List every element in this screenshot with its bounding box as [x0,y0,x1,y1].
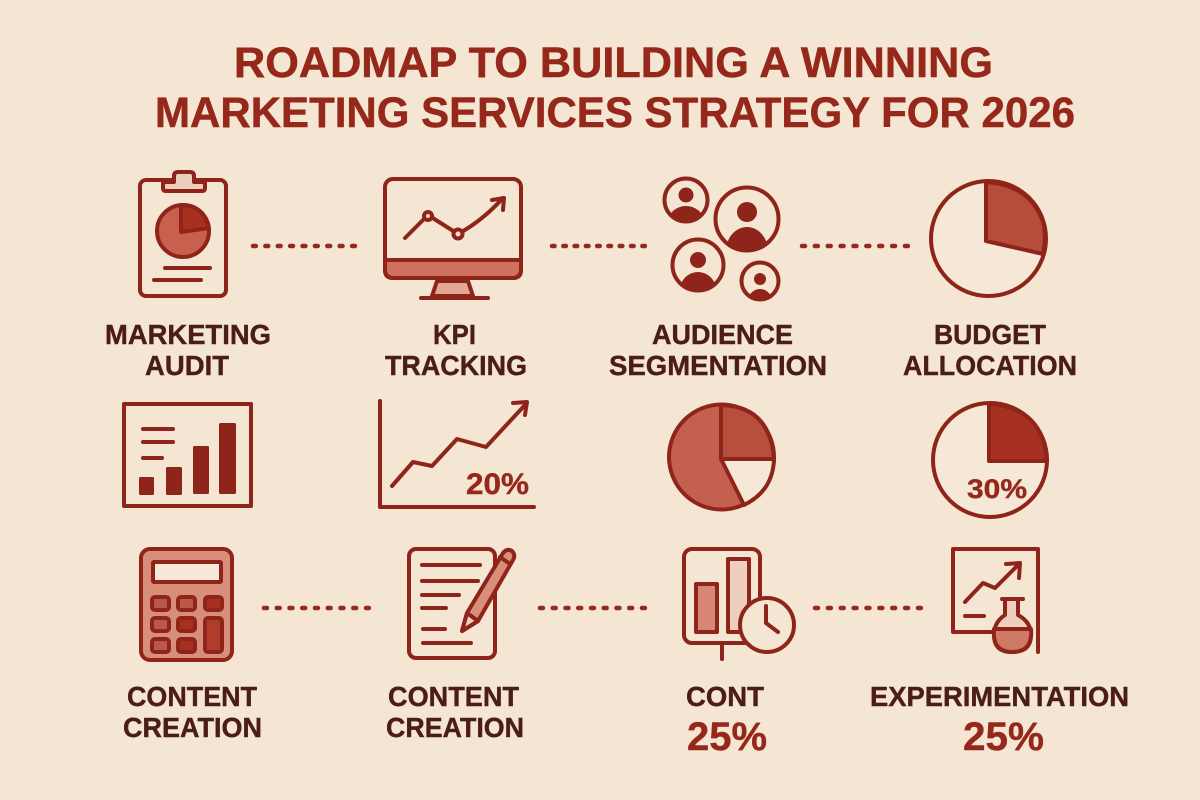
label: content creation 2: CONTENT [388,681,519,712]
label: audience segmentation: SEGMENTATION [609,350,827,381]
label: kpi tracking: TRACKING [385,350,527,381]
icon: chart with flask [953,549,1038,652]
label: cont 25%: CONT [686,681,764,712]
chart: three-part pie [669,404,774,510]
icon: report with bar chart [124,404,251,506]
label: budget allocation: BUDGET [934,319,1046,350]
title: ROADMAP TO BUILDING A WINNING [234,39,993,87]
label: budget allocation [903,319,1077,381]
label: cont 25% [686,681,767,759]
icon: clipboard with pie chart [140,172,226,296]
label: audience segmentation [609,319,827,381]
icon: document with pencil [409,549,514,658]
label: experimentation 25%: EXPERIMENTATION [870,681,1129,712]
label: content creation 2 [386,681,524,743]
label: content creation 2: CREATION [386,712,524,743]
connector: dotted line 1 [253,244,355,248]
label: experimentation 25%: 25% [963,715,1044,759]
label: kpi tracking [385,319,527,381]
label: budget allocation: ALLOCATION [903,350,1077,381]
label: marketing audit: AUDIT [145,350,229,381]
chart: 30% pie: 30% [967,474,1027,504]
icon: monitor with trend line [385,179,521,298]
label: cont 25%: 25% [687,715,767,759]
label: content creation 1: CONTENT [127,681,257,712]
label: marketing audit [105,319,271,381]
connector: dotted line 2 [552,244,645,248]
icon: calculator [141,549,232,660]
label: experimentation 25% [870,681,1129,759]
chart: growth line 20%: 20% [466,468,529,501]
label: kpi tracking: KPI [433,319,476,350]
title: MARKETING SERVICES STRATEGY FOR 2026 [155,89,1075,137]
connector: dotted line 3 [802,244,908,248]
label: content creation 1 [123,681,262,743]
icon: audience group [664,178,778,319]
label: audience segmentation: AUDIENCE [652,319,793,350]
icon: budget pie chart [931,181,1046,296]
connector: dotted line 4 [264,606,369,610]
chart: growth line 20% [380,401,534,507]
connector: dotted line 5 [540,606,645,610]
label: content creation 1: CREATION [123,712,262,743]
label: marketing audit: MARKETING [105,319,271,350]
icon: bar chart board with clock [684,549,794,659]
chart: 30% pie [933,403,1047,517]
connector: dotted line 6 [815,606,921,610]
title [155,39,1075,137]
